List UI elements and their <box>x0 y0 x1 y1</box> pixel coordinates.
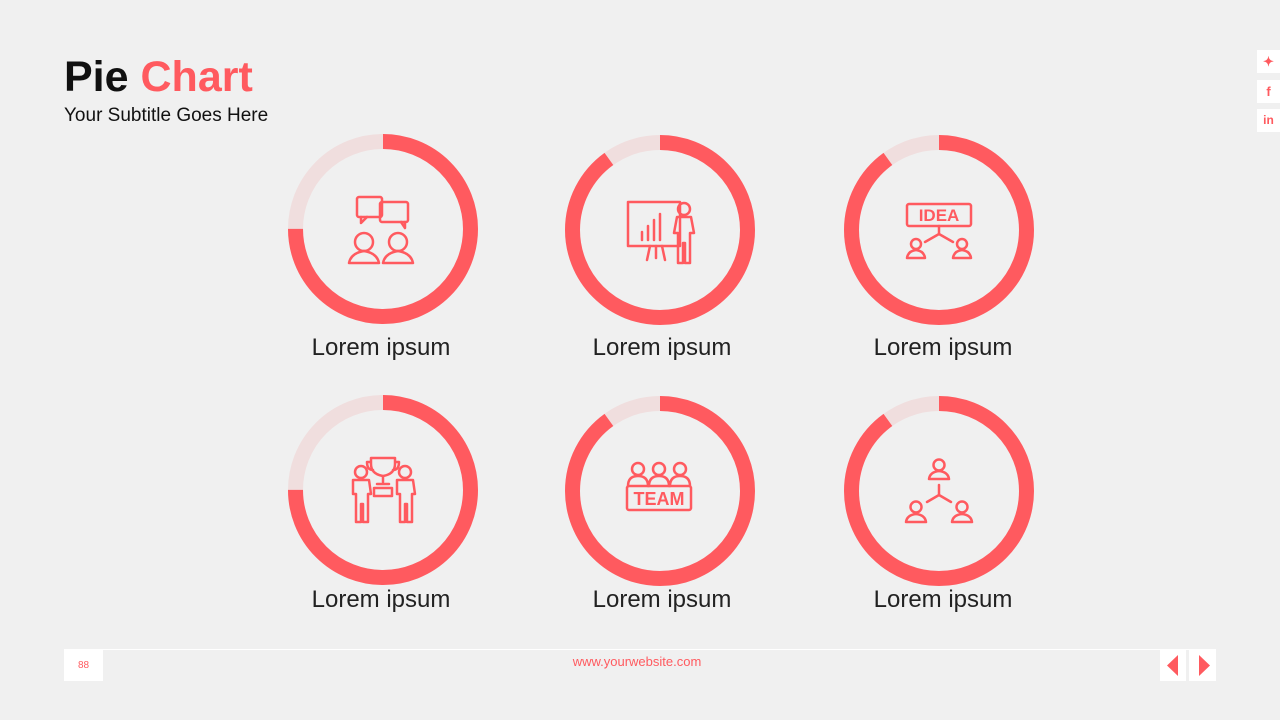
subtitle: Your Subtitle Goes Here <box>64 105 268 126</box>
icon: network <box>906 460 972 522</box>
ring 2 <box>572 142 748 318</box>
icon: trophy <box>353 458 415 522</box>
website: www.yourwebsite.com <box>573 654 701 669</box>
icon: team <box>627 463 691 510</box>
icon: team: TEAM <box>634 489 684 509</box>
icon: linkedin <box>1257 109 1280 132</box>
icon: idea team <box>907 204 971 258</box>
label 6: Lorem ipsum <box>874 586 1012 613</box>
page number: 88 <box>78 660 89 671</box>
label 1: Lorem ipsum <box>312 334 450 361</box>
ring 5 <box>572 404 748 578</box>
ring 3 <box>852 142 1026 318</box>
icon: linkedin: in <box>1263 113 1274 127</box>
ring 6 <box>852 404 1026 578</box>
social icons <box>1257 50 1280 132</box>
icon: idea team: IDEA <box>919 206 959 225</box>
nav arrows <box>1160 650 1216 681</box>
label 3: Lorem ipsum <box>874 334 1012 361</box>
ring 1 <box>296 142 470 316</box>
ring 4 <box>296 402 470 578</box>
icon: facebook <box>1257 80 1280 103</box>
page number <box>64 650 103 681</box>
label 4: Lorem ipsum <box>312 586 450 613</box>
icon: presentation <box>628 202 694 263</box>
icon: twitter: ✦ <box>1263 54 1274 69</box>
icon: facebook: f <box>1266 84 1271 99</box>
icon: twitter <box>1257 50 1280 73</box>
title: Pie Chart <box>64 53 253 101</box>
label 2: Lorem ipsum <box>593 334 731 361</box>
icon: conversation <box>349 197 413 263</box>
label 5: Lorem ipsum <box>593 586 731 613</box>
arrow: prev <box>1160 650 1186 681</box>
arrow: next <box>1189 650 1216 681</box>
